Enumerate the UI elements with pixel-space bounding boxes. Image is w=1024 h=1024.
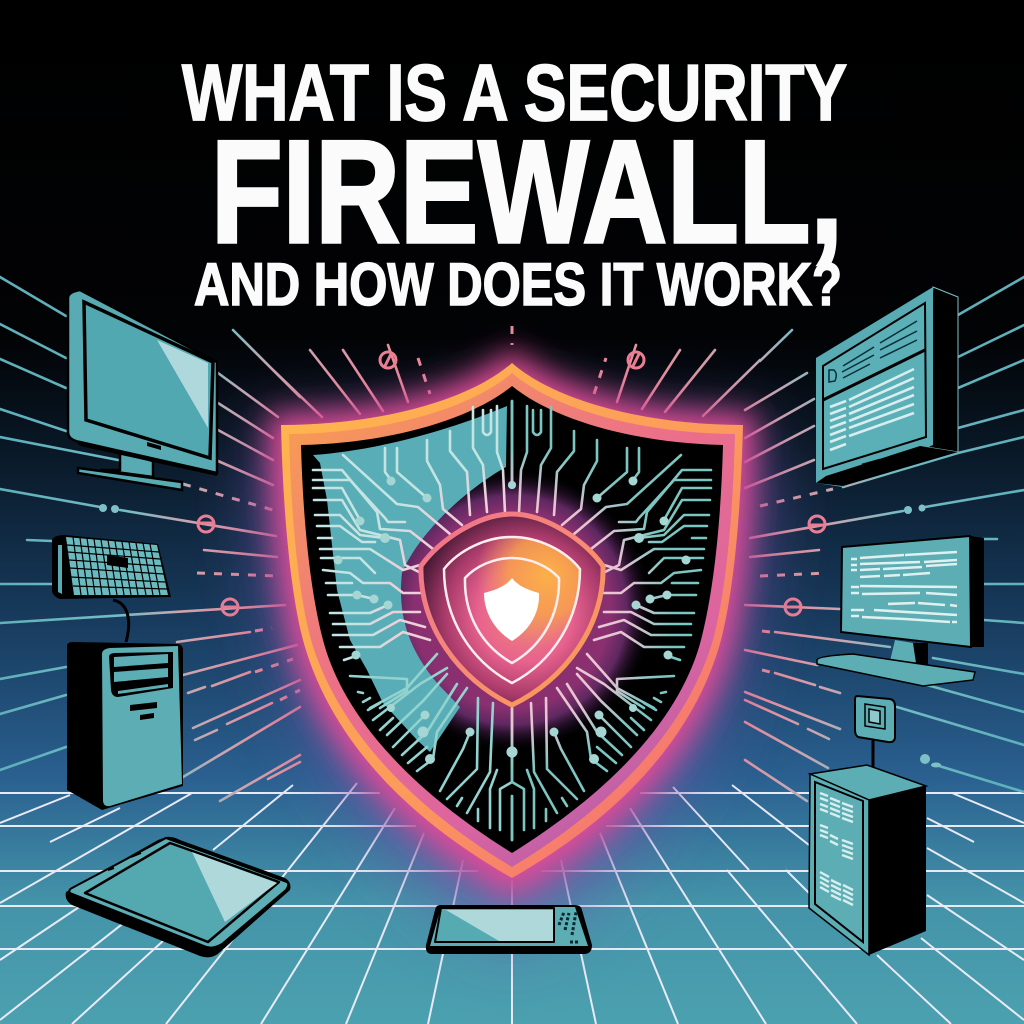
- desktop screen: [841, 536, 971, 647]
- keyboard dark slot: [107, 555, 128, 568]
- white shield icon: [484, 578, 539, 641]
- desktop keyboard base: [817, 654, 975, 686]
- screen highlight: [157, 340, 208, 428]
- cable: [113, 600, 129, 642]
- bezel shadow: [816, 446, 958, 486]
- emblem body: [421, 514, 603, 705]
- monitor screen: [823, 303, 926, 469]
- emblem outline: [444, 537, 580, 683]
- connection dots on lines: [99, 504, 941, 768]
- keyboard side edge: [58, 545, 62, 594]
- desktop text rows: [851, 552, 957, 622]
- device: left monitor: [68, 290, 217, 490]
- central emblem: [421, 503, 620, 705]
- unit icon: [865, 704, 885, 729]
- desktop side: [970, 536, 984, 647]
- device: keyboard: [52, 535, 171, 642]
- phone screen: [435, 908, 554, 942]
- server side: [869, 786, 926, 955]
- tower indicators: [130, 702, 157, 720]
- server panel: [815, 782, 863, 942]
- radiating network lines: [0, 277, 1024, 801]
- vent slats: [114, 654, 168, 694]
- dashed signal lines: [183, 326, 833, 700]
- server data rows: [820, 793, 853, 905]
- monitor stand: [100, 452, 153, 477]
- circuit dots left: [334, 476, 518, 764]
- device: upper right monitor: [816, 287, 958, 487]
- main shield: [281, 363, 743, 878]
- circuit dots right: [506, 476, 690, 764]
- monitor inner bezel: [84, 302, 213, 458]
- tablet speaker marks: [108, 853, 141, 870]
- title line 1: WHAT IS A SECURITY: [182, 48, 847, 137]
- tablet body: [66, 837, 290, 957]
- title line 2: FIREWALL,: [211, 110, 843, 273]
- device: small wall unit: [855, 696, 895, 768]
- tower front: [102, 646, 182, 806]
- monitor base: [78, 468, 182, 490]
- monitor button: [147, 442, 161, 450]
- signal nodes on lines: [198, 352, 825, 615]
- title line 3: AND HOW DOES IT WORK?: [194, 251, 842, 318]
- monitor side: [920, 287, 958, 452]
- screen text rows: [830, 369, 914, 450]
- server front: [809, 774, 869, 955]
- circuit traces lower right: [512, 654, 674, 840]
- header divider: [823, 350, 925, 400]
- device: tablet: [66, 837, 290, 957]
- tower vent: [109, 652, 173, 697]
- device: tower computer: [67, 642, 183, 810]
- device: right server: [809, 765, 926, 955]
- key grid: [66, 537, 168, 595]
- phone body: [426, 905, 592, 954]
- title: [182, 48, 847, 318]
- tower body: [67, 642, 183, 810]
- phone highlight: [446, 910, 553, 941]
- keyboard body: [52, 535, 171, 599]
- screen icon: [829, 370, 836, 382]
- emblem rim: [421, 514, 603, 705]
- phone buttons: [559, 912, 578, 942]
- device: phone: [426, 905, 592, 954]
- circuit traces right: [512, 401, 711, 660]
- unit cable: [872, 738, 874, 768]
- monitor frame: [68, 290, 217, 473]
- tablet face: [69, 838, 288, 948]
- perspective floor grid: [0, 783, 1024, 1024]
- shield rim: [281, 363, 743, 878]
- circuit traces left: [313, 401, 512, 660]
- unit body: [855, 696, 895, 742]
- server top: [810, 765, 926, 800]
- circuit traces lower left: [350, 654, 512, 840]
- shield black interior: [301, 386, 723, 853]
- monitor button: [862, 460, 880, 465]
- phone face: [430, 907, 588, 946]
- monitor front: [816, 287, 933, 487]
- tablet screen: [85, 843, 279, 942]
- central halo: [401, 475, 647, 744]
- stand shadow: [913, 643, 928, 665]
- device: right desktop monitor: [817, 536, 984, 686]
- monitor shadow: [68, 430, 217, 476]
- unit glyph: [869, 709, 880, 724]
- emblem inner outline: [465, 558, 559, 663]
- shield outer glow: [285, 370, 739, 895]
- shield band: [289, 373, 735, 867]
- desktop stand: [890, 640, 928, 663]
- tablet highlight: [192, 852, 277, 922]
- emblem flare: [480, 538, 579, 640]
- glass reflection: [313, 406, 507, 752]
- key lines: [67, 537, 167, 595]
- screen header lines: [842, 321, 917, 378]
